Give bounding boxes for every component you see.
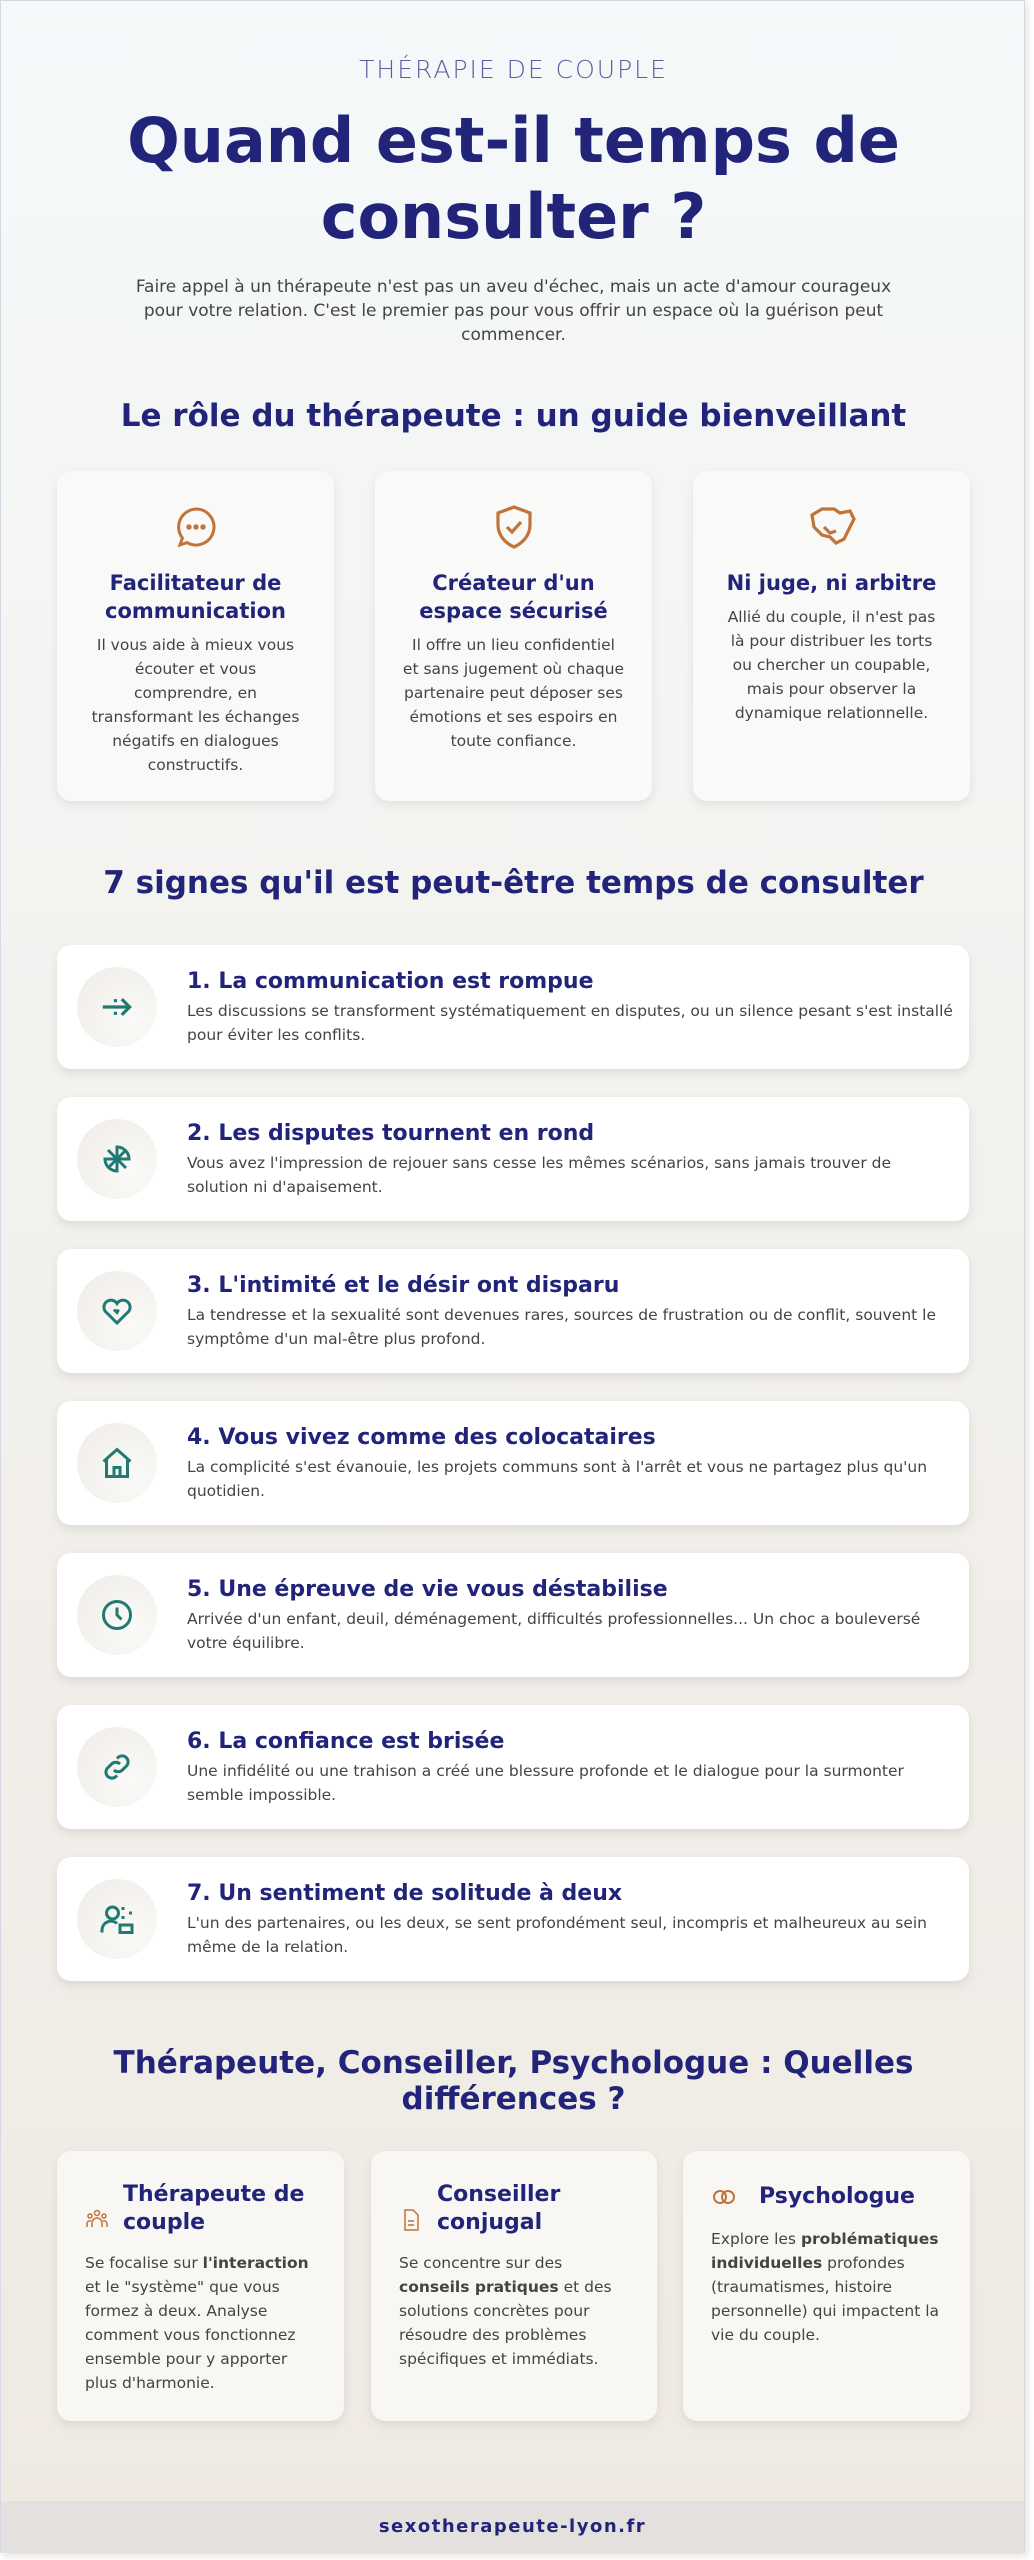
footer: [1, 2501, 1024, 2553]
panel: espace sécurisé: et sans jugement où chaque partenaire peut déposer ses émotions et ses espoirs en toute confiance.: [403, 660, 624, 750]
panel: psychologue: [683, 2151, 970, 2421]
panel: conseiller conjugal: Se concentre sur des conseils pratiques et des solutions concrètes pour résoudre des problèmes spécifiques et immédiats.: [399, 2254, 612, 2368]
intro: Faire appel à un thérapeute n'est pas un aveu d'échec, mais un acte d'amour courageux pour votre relation. C'est le premier pas pour vous offrir un espace où la guérison peut commencer.: [136, 277, 891, 345]
panel: ni juge: Ni juge, ni arbitre: [727, 571, 936, 595]
panel: espace sécurisé: Il offre un lieu confidentiel: [412, 636, 615, 654]
sign 3: 3. L'intimité et le désir ont disparu: [187, 1273, 619, 1298]
title: Quand est-il temps de: [127, 104, 900, 177]
panel: psychologue: Psychologue: [759, 2184, 915, 2209]
sign 3: La tendresse et la sexualité sont devenues rares, sources de frustration ou de conflit, souvent le symptôme d'un mal-être plus profond.: [187, 1306, 936, 1348]
sign 2: 2. Les disputes tournent en rond: [187, 1121, 594, 1146]
panel: thérapeute de couple: Se focalise sur l'interaction et le "système" que vous formez à deux. Analyse comment vous fonctionnez ensemble pour y apporter plus d'harmonie.: [85, 2254, 309, 2392]
panel: espace sécurisé: [375, 471, 652, 801]
sign 7: 7. Un sentiment de solitude à deux: [187, 1881, 622, 1906]
sign 6: 6. La confiance est brisée: [187, 1729, 504, 1754]
eyebrow: THÉRAPIE DE COUPLE: [359, 55, 668, 84]
sign 4: 4. Vous vivez comme des colocataires: [187, 1425, 656, 1450]
heading: role: Le rôle du thérapeute : un guide bienveillant: [121, 398, 906, 434]
sign 1: Les discussions se transforment systématiquement en disputes, ou un silence pesant s'est installé pour éviter les conflits.: [187, 1002, 953, 1044]
sign 4: La complicité s'est évanouie, les projets communs sont à l'arrêt et vous ne partagez plus qu'un quotidien.: [187, 1458, 927, 1500]
sign 2: Vous avez l'impression de rejouer sans cesse les mêmes scénarios, sans jamais trouver de: [187, 1154, 891, 1172]
sign 6: Une infidélité ou une trahison a créé une blessure profonde et le dialogue pour la surmonter semble impossible.: [187, 1762, 904, 1804]
panel: conseiller conjugal: [371, 2151, 657, 2421]
sign 3: [57, 1249, 969, 1373]
sign 7: L'un des partenaires, ou les deux, se sent profondément seul, incompris et malheureux au sein même de la relation.: [187, 1914, 927, 1956]
sign 1: [57, 945, 969, 1069]
sign 2: solution ni d'apaisement.: [187, 1178, 383, 1196]
sign 2: [57, 1097, 969, 1221]
panel: facilitateur: Il vous aide à mieux vous écouter et vous comprendre, en transformant les échanges négatifs en dialogues constructifs.: [92, 636, 299, 774]
title: [127, 104, 900, 253]
panel: conseiller conjugal: Conseiller conjugal: [437, 2182, 560, 2235]
footer: sexotherapeute-lyon.fr: [379, 2516, 646, 2537]
panel: facilitateur: Facilitateur de communication: [105, 571, 286, 623]
panel: psychologue: Explore les problématiques individuelles profondes (traumatismes, histoire personnelle) qui impactent la vie du couple.: [711, 2230, 939, 2344]
icon: rings: [713, 2190, 735, 2204]
title: consulter ?: [321, 180, 706, 253]
panel: thérapeute de couple: Thérapeute de couple: [123, 2182, 304, 2235]
icon: handshake: [810, 507, 856, 545]
sign 1: 1. La communication est rompue: [187, 969, 594, 994]
panel: thérapeute de couple: [57, 2151, 344, 2421]
panel: ni juge: Allié du couple, il n'est pas là pour distribuer les torts ou chercher un coupable, mais pour observer la dynamique relationnelle.: [728, 608, 935, 722]
sign 4: [57, 1401, 969, 1525]
sign 5: [57, 1553, 969, 1677]
icon: document: [404, 2209, 419, 2231]
panel: espace sécurisé: Créateur d'un espace sécurisé: [419, 571, 608, 623]
icon: group: [86, 2210, 108, 2227]
panel: ni juge: [693, 471, 970, 801]
icon: shield: [496, 505, 532, 549]
heading: differences: Thérapeute, Conseiller, Psychologue : Quelles différences ?: [114, 2045, 913, 2117]
heading: signs: 7 signes qu'il est peut-être temps de consulter: [103, 865, 924, 901]
sign 5: 5. Une épreuve de vie vous déstabilise: [187, 1577, 668, 1602]
sign 5: Arrivée d'un enfant, deuil, déménagement, difficultés professionnelles... Un choc a bouleversé votre équilibre.: [187, 1610, 920, 1652]
sign 7: [57, 1857, 969, 1981]
sign 6: [57, 1705, 969, 1829]
icon: chat: [177, 508, 216, 548]
panel: facilitateur: [57, 471, 334, 801]
